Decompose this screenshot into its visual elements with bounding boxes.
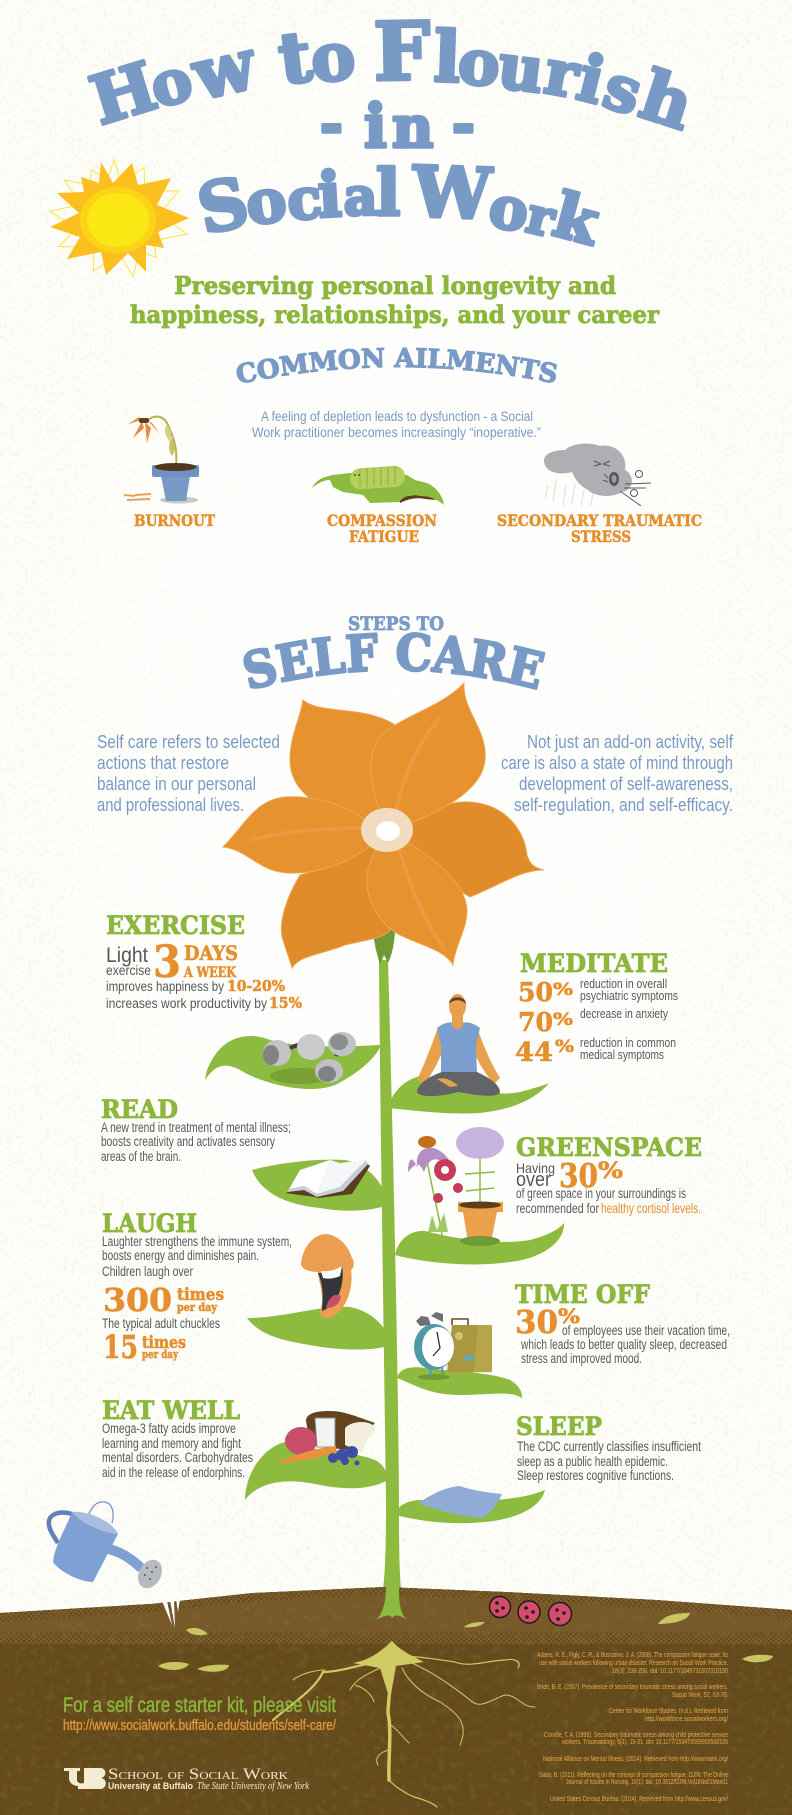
- text: exercise stats: 15%: [269, 994, 302, 1012]
- text: greenspace: %: [598, 1158, 623, 1184]
- heading: steps to self care: STEPS TO: [348, 613, 444, 635]
- text: exercise stats: exercise: [106, 962, 151, 978]
- text: read: areas of the brain.: [101, 1149, 181, 1164]
- subtitle: happiness, relationships, and your career: [130, 300, 659, 329]
- text: sleep: sleep as a public health epidemic.: [517, 1454, 668, 1469]
- references: Center for Workforce Studies. (n.d.). Retrieved from: [609, 1706, 728, 1715]
- text: eat well: aid in the release of endorphins.: [102, 1465, 245, 1480]
- text: eat well: learning and memory and fight: [102, 1436, 241, 1451]
- subtitle: Preserving personal longevity and: [174, 271, 616, 300]
- leaf: greenspace: [395, 1223, 564, 1264]
- panel: greenspace: [395, 1127, 702, 1264]
- label: secondary traumatic stress: STRESS: [571, 527, 631, 546]
- text: self care definition: [97, 732, 280, 815]
- icon: wilted plant in pot: [124, 417, 199, 504]
- text: sleep: [517, 1439, 701, 1483]
- title: h: [631, 55, 703, 146]
- text: exercise stats: DAYS: [184, 941, 238, 965]
- text: meditate stats: 50: [518, 978, 553, 1008]
- panel: read: [101, 1095, 388, 1211]
- text: state of mind: Not just an add-on activity, self: [527, 732, 734, 752]
- label: secondary traumatic stress: SECONDARY TRAUMATIC: [497, 511, 702, 530]
- text: meditate stats: [515, 977, 678, 1068]
- text: meditate stats: %: [553, 1010, 573, 1030]
- roots: [273, 1641, 535, 1807]
- text: greenspace: of green space in your surroundings is: [516, 1186, 686, 1201]
- leaf: read: [252, 1160, 388, 1211]
- title: W: [410, 150, 494, 236]
- text: laugh: [102, 1234, 292, 1366]
- icon: sun: [39, 148, 200, 290]
- title: u: [494, 29, 548, 107]
- leaf: meditate: [388, 1075, 549, 1113]
- panel: eat well: [102, 1396, 388, 1500]
- logo: UB School of Social Work: [64, 1766, 309, 1792]
- text: state of mind: care is also a state of mind through: [501, 753, 733, 773]
- text: laugh: per day: [142, 1348, 178, 1361]
- references: 18(3), 238-250. doi: 10.1177/1049731507310190: [612, 1666, 728, 1675]
- title: S: [191, 162, 256, 251]
- logo: UB School of Social Work: The State University of New York: [197, 1781, 309, 1792]
- text: exercise stats: [106, 937, 302, 1012]
- text: greenspace: [516, 1156, 701, 1216]
- text: laugh: 15: [103, 1328, 138, 1366]
- subtitle: [130, 271, 659, 329]
- title: l: [432, 15, 462, 99]
- title: n: [392, 94, 433, 161]
- text: laugh: The typical adult chuckles: [102, 1316, 220, 1331]
- text: eat well: mental disorders. Carbohydrates: [102, 1450, 253, 1465]
- text: exercise stats: improves happiness by: [106, 979, 224, 994]
- text: time off: %: [558, 1304, 580, 1328]
- title: k: [546, 178, 608, 260]
- text: state of mind: [501, 732, 734, 815]
- text: state of mind: development of self-awareness,: [519, 774, 733, 794]
- text: laugh: 300: [103, 1281, 172, 1319]
- text: ailments intro: Work practitioner becomes increasingly “inoperative.”: [252, 425, 541, 440]
- label: burnout: BURNOUT: [134, 511, 215, 530]
- sepal: [372, 926, 395, 965]
- text: read: [101, 1120, 291, 1164]
- text: laugh: per day: [177, 1301, 218, 1314]
- text: laugh: Laughter strengthens the immune system,: [102, 1234, 292, 1249]
- leaf: laugh: [247, 1307, 392, 1350]
- title: F: [373, 4, 431, 99]
- heading: laugh: LAUGH: [102, 1209, 197, 1238]
- text: eat well: Omega-3 fatty acids improve: [102, 1421, 236, 1436]
- logo: UB School of Social Work: School of Social Work: [108, 1766, 288, 1783]
- title: i: [316, 158, 343, 232]
- title: -: [452, 91, 475, 156]
- leaf: exercise: [205, 1036, 381, 1089]
- panel: burnout: [124, 417, 215, 530]
- icon: potted flowers: [408, 1127, 504, 1246]
- title: s: [596, 50, 650, 130]
- text: laugh: boosts energy and diminishes pain.: [102, 1248, 259, 1263]
- label: compassion fatigue: [327, 511, 437, 546]
- text: exercise stats: Light: [106, 944, 148, 967]
- text: time off: of employees use their vacation time,: [562, 1323, 730, 1338]
- text: meditate stats: decrease in anxiety: [580, 1007, 669, 1021]
- text: exercise stats: A WEEK: [183, 965, 237, 981]
- heading: exercise: EXERCISE: [106, 911, 245, 940]
- text: ailments intro: [252, 409, 541, 440]
- text: self care definition: and professional lives.: [97, 795, 244, 815]
- heading: time off: TIME OFF: [515, 1280, 650, 1309]
- text: read: A new trend in treatment of mental illness;: [101, 1120, 291, 1135]
- title: -: [320, 91, 343, 156]
- text: greenspace: Having: [516, 1160, 555, 1176]
- icon: watering can: [49, 1502, 167, 1592]
- text: laugh: times: [177, 1285, 224, 1305]
- text: ailments intro: A feeling of depletion leads to dysfunction - a Social: [261, 409, 533, 424]
- text: meditate stats: 70: [518, 1008, 553, 1038]
- label: compassion fatigue: COMPASSION: [327, 511, 437, 530]
- text: sleep: Sleep restores cognitive functions.: [517, 1468, 674, 1483]
- stem: [372, 926, 407, 1620]
- title: o: [485, 173, 533, 245]
- icon: storm cloud blowing scissors: [544, 444, 651, 506]
- text: sleep: The CDC currently classifies insufficient: [517, 1439, 701, 1454]
- text: self care definition: actions that restore: [97, 753, 229, 773]
- title: t: [274, 15, 316, 101]
- petal: bottom right: [367, 835, 467, 965]
- references: [537, 1650, 729, 1803]
- leaf: sleep: [396, 1490, 545, 1523]
- soil: [0, 1587, 792, 1815]
- leaf: time off: [397, 1367, 522, 1398]
- text: self care definition: balance in our personal: [97, 774, 256, 794]
- title: r: [521, 185, 561, 249]
- flower: [223, 683, 544, 968]
- logo: UB School of Social Work: University at Buffalo: [108, 1781, 193, 1792]
- text: greenspace: 30: [559, 1156, 598, 1195]
- title: o: [241, 165, 291, 240]
- stem base: [376, 1585, 407, 1620]
- leaf: eat well: [245, 1442, 388, 1500]
- flower centre: [361, 808, 413, 852]
- text: meditate stats: reduction in common: [580, 1036, 676, 1050]
- panel: exercise: [106, 911, 381, 1089]
- references: http://workforce.socialworkers.org/: [645, 1714, 729, 1723]
- icon: ladybugs: [490, 1596, 572, 1626]
- text: greenspace: healthy cortisol levels.: [601, 1201, 701, 1216]
- icons: fallen leaves: [158, 1613, 773, 1672]
- title: H: [82, 46, 165, 140]
- label: compassion fatigue: FATIGUE: [349, 527, 419, 546]
- title: i: [570, 41, 612, 119]
- text: read: boosts creativity and activates sensory: [101, 1134, 275, 1149]
- text: exercise stats: 10-20%: [227, 977, 285, 995]
- heading: eat well: EAT WELL: [102, 1396, 240, 1425]
- text: meditate stats: %: [553, 980, 573, 1000]
- text: greenspace: over: [516, 1169, 551, 1191]
- text: meditate stats: %: [555, 1037, 574, 1057]
- heading: common ailments: COMMON AILMENTS: [236, 347, 558, 383]
- panel: laugh: [102, 1209, 392, 1366]
- panel: meditate: [388, 949, 678, 1113]
- icon: alarm clock: [414, 1312, 454, 1380]
- text: time off: [515, 1303, 730, 1366]
- text: eat well: [102, 1421, 253, 1480]
- panel: time off: [397, 1280, 730, 1398]
- panel: secondary traumatic stress: [497, 444, 702, 546]
- panel: sleep: [396, 1412, 701, 1523]
- references: Social Work, 52, 63-70.: [672, 1690, 728, 1699]
- title: o: [143, 45, 200, 122]
- heading: meditate: MEDITATE: [520, 949, 668, 978]
- title: a: [343, 166, 378, 228]
- references: workers. Traumatology, 5(1), 15-31. doi: 10.1177/153476569900500105: [561, 1737, 728, 1746]
- icon: food group: [276, 1411, 375, 1466]
- icon: blanket: [419, 1486, 502, 1518]
- text: meditate stats: reduction in overall: [580, 977, 667, 991]
- text: state of mind: self-regulation, and self-efficacy.: [514, 795, 733, 815]
- text: laugh: times: [142, 1333, 186, 1353]
- text: exercise stats: 3: [153, 937, 181, 988]
- title: [82, 4, 703, 260]
- text: meditate stats: medical symptoms: [580, 1048, 664, 1062]
- title: r: [539, 35, 586, 113]
- text: time off: which leads to better quality sleep, decreased: [520, 1337, 727, 1352]
- petal: top left: [290, 700, 397, 830]
- title: c: [284, 165, 324, 234]
- petal: top right: [371, 683, 485, 830]
- text: time off: 30: [515, 1303, 558, 1341]
- title: o: [456, 25, 502, 101]
- text: greenspace: recommended for: [516, 1201, 599, 1216]
- heading: steps to self care: SELF CARE: [243, 632, 546, 690]
- heading: read: READ: [101, 1095, 178, 1124]
- text: laugh: Children laugh over: [102, 1264, 193, 1279]
- icon: meditating person: [417, 994, 500, 1096]
- call to action: http://www.socialwork.buffalo.edu/students/self-care/: [63, 1718, 337, 1734]
- text: meditate stats: psychiatric symptoms: [580, 989, 678, 1003]
- label: secondary traumatic stress: [497, 511, 702, 546]
- text: time off: stress and improved mood.: [521, 1351, 642, 1366]
- heading: sleep: SLEEP: [516, 1412, 602, 1441]
- icon: suitcase: [447, 1319, 492, 1373]
- icon: laughing face: [301, 1234, 354, 1318]
- panel: compassion fatigue: [312, 465, 444, 546]
- title: l: [376, 156, 400, 231]
- title: o: [308, 16, 358, 98]
- petal: bottom left: [281, 840, 390, 968]
- petal: right: [395, 802, 544, 897]
- call to action: [63, 1694, 337, 1734]
- text: exercise stats: increases work productivity by: [106, 996, 267, 1011]
- petal: left: [223, 797, 380, 873]
- text: self care definition: Self care refers to selected: [97, 732, 280, 752]
- call to action: For a self care starter kit, please visit: [63, 1694, 336, 1717]
- icon: dumbbells: [263, 1032, 356, 1084]
- icon: caterpillar on leaf: [312, 465, 444, 505]
- title: w: [184, 22, 264, 117]
- icon: open book: [285, 1160, 370, 1198]
- heading: greenspace: GREENSPACE: [516, 1133, 702, 1162]
- text: meditate stats: 44: [515, 1038, 553, 1068]
- title: i: [364, 92, 387, 162]
